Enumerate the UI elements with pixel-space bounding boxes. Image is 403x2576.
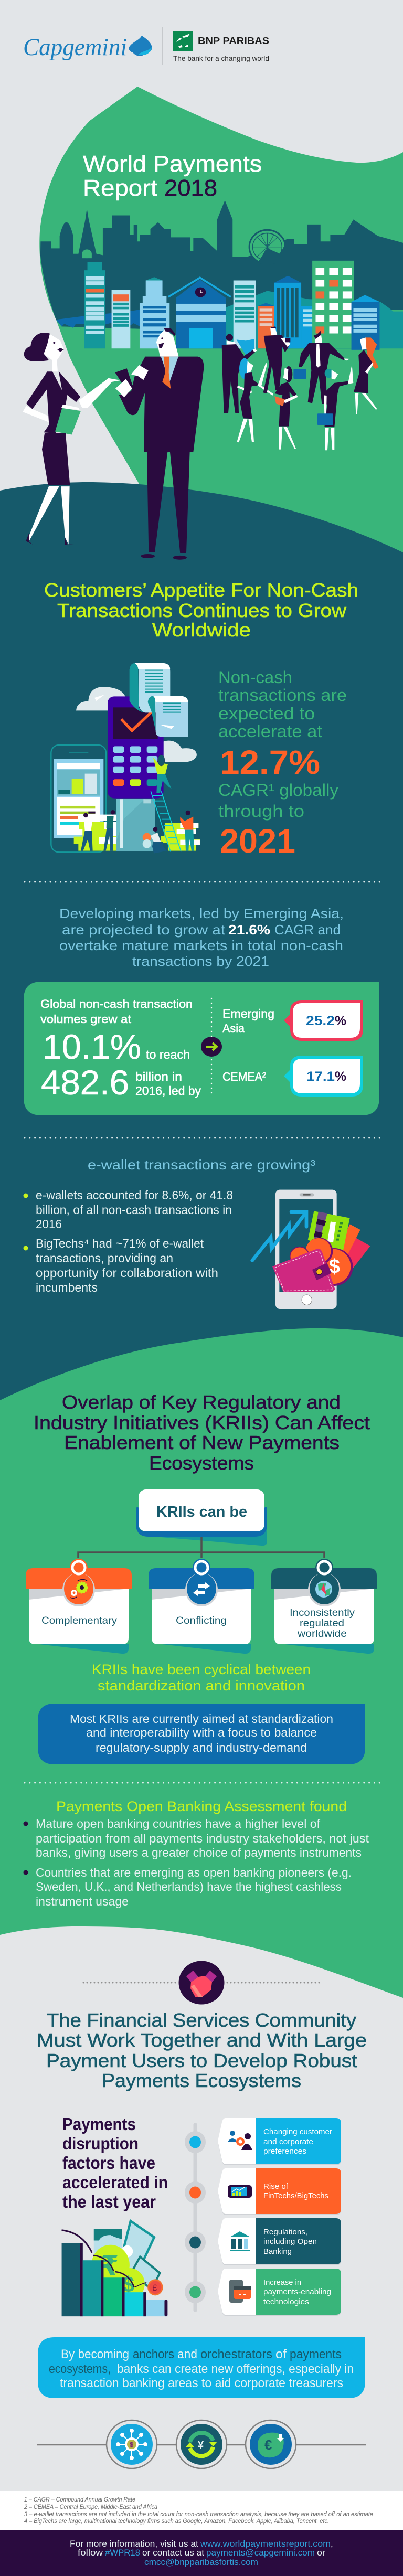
icon: phone and card bbox=[229, 2280, 251, 2303]
icon: exchange with yen bbox=[176, 2420, 227, 2468]
callout: 17.1%: % bbox=[335, 1069, 346, 1084]
panel: footer contact: www.worldpaymentsreport.com bbox=[200, 2539, 331, 2549]
building: orange block bbox=[258, 303, 274, 348]
icon: wallet bbox=[272, 1249, 335, 1292]
icon: cards bbox=[308, 1211, 370, 1268]
title: 2018 bbox=[164, 175, 217, 201]
text: global volumes: 10.1% bbox=[43, 1027, 141, 1066]
callout: 17.1%: 17.1 bbox=[306, 1069, 335, 1084]
building: blue tower bbox=[274, 276, 314, 348]
heading: financial services community: Payment Users to Develop Robust bbox=[46, 2050, 357, 2071]
text: payments disruption factors: the last year bbox=[62, 2192, 156, 2211]
text: non-cash growth callout: transactions are bbox=[218, 686, 347, 705]
person: large man with phone bbox=[115, 328, 204, 560]
text: region labels: Asia bbox=[222, 1021, 245, 1035]
callout: 25.2%: % bbox=[335, 1014, 346, 1028]
panel: complementary card: Complementary bbox=[41, 1615, 118, 1626]
text: KRIIs cyclical bbox=[92, 1662, 311, 1694]
text: payments disruption factors: Payments bbox=[62, 2114, 136, 2134]
text: e-wallet bullets: incumbents bbox=[36, 1281, 98, 1294]
panel: anchors and orchestrators callout: banks can create new offerings, especially in bbox=[117, 2362, 354, 2376]
text: non-cash growth callout: 12.7% bbox=[220, 743, 320, 781]
panel: conflicting card bbox=[149, 1559, 254, 1654]
icon: exchange with yen: ¥ bbox=[198, 2440, 204, 2451]
text: developing markets: Developing markets, led by Emerging Asia, bbox=[59, 906, 344, 921]
text: developing markets: CAGR and bbox=[274, 922, 341, 938]
icon: network with dollar: $ bbox=[130, 2441, 134, 2449]
panel: green KRII section background bbox=[0, 1328, 403, 2020]
panel: KRIIs standardization callout: and interoperability with a focus to balance bbox=[86, 1726, 317, 1739]
diagram: KRIIs can be box bbox=[136, 1489, 267, 1546]
text: global volumes: volumes grew at bbox=[40, 1013, 131, 1026]
text: payments disruption factors: accelerated in bbox=[62, 2173, 168, 2192]
panel: footer contact: For more information, visit us at bbox=[70, 2539, 198, 2549]
icon: payment terminal bbox=[108, 696, 164, 799]
heading: financial services community: Must Work Together and With Large bbox=[37, 2029, 367, 2051]
icon: ladder bbox=[151, 791, 181, 851]
person: man with binoculars bbox=[81, 812, 96, 851]
panel: conflicting card: Conflicting bbox=[176, 1615, 227, 1626]
panel: changing customer preferences bbox=[218, 2118, 341, 2165]
text: non-cash growth callout: through to bbox=[218, 802, 304, 821]
heading: customers' appetite: Worldwide bbox=[152, 619, 251, 641]
panel: anchors and orchestrators callout: By becoming bbox=[61, 2347, 129, 2361]
icon: globe bbox=[315, 1581, 332, 1598]
person: man with phone bbox=[263, 326, 290, 393]
building: stepped tower bbox=[140, 277, 169, 348]
building: dark blue block bbox=[352, 295, 379, 350]
text: region labels bbox=[222, 1007, 274, 1083]
heading: KRIIs overlap bbox=[34, 1391, 370, 1474]
icon: banknotes bbox=[94, 2221, 160, 2289]
heading: open banking assessment: Payments Open Banking Assessment found bbox=[56, 1798, 347, 1814]
text: global volumes: Global non-cash transaction bbox=[40, 997, 193, 1010]
panel: inconsistently regulated card: worldwide bbox=[297, 1628, 347, 1640]
logo: BNP Paribas: BNP PARIBAS bbox=[198, 36, 269, 46]
panel: changing customer preferences: Changing customer bbox=[263, 2127, 332, 2136]
person: woman with blue briefcase bbox=[317, 365, 353, 450]
panel: payments-enabling technologies: payments-enabling bbox=[263, 2287, 331, 2296]
chart: declining bars bbox=[62, 2243, 167, 2316]
panel: footer contact bbox=[0, 2530, 403, 2576]
text: global volumes: to reach bbox=[146, 1048, 190, 1061]
text: global volumes: 482.6 bbox=[41, 1063, 129, 1102]
heading: customers' appetite: Transactions Continues to Grow bbox=[57, 600, 347, 621]
icon: card bbox=[116, 799, 155, 851]
heading: customers' appetite: Customers’ Appetite For Non-Cash bbox=[44, 579, 358, 601]
text: developing markets: transactions by 2021 bbox=[132, 953, 269, 969]
icon: coins bbox=[91, 2245, 163, 2300]
icon: coins bbox=[290, 1238, 353, 1286]
panel: footnotes: 4 – BigTechs are large, multinational technology firms such as Google, Amazon, Facebook, Apple, Alibaba, Tencent, etc. bbox=[24, 2518, 329, 2525]
logo: Capgemini: Capgemini bbox=[23, 34, 127, 61]
panel: payments-enabling technologies: Increase in bbox=[263, 2278, 301, 2287]
panel: dark teal section background bbox=[0, 482, 403, 1417]
text: open banking bullets: instrument usage bbox=[36, 1894, 129, 1908]
panel: anchors and orchestrators callout: orchestrators bbox=[200, 2347, 272, 2361]
heading: KRIIs overlap: Ecosystems bbox=[149, 1452, 254, 1474]
title: World Payments bbox=[83, 151, 262, 177]
panel: footer contact: payments@capgemini.com bbox=[206, 2548, 315, 2558]
panel: footnotes bbox=[0, 2491, 403, 2530]
title bbox=[83, 151, 262, 201]
panel: rise of FinTechs: Rise of bbox=[263, 2182, 289, 2191]
text: non-cash growth callout bbox=[218, 668, 347, 860]
panel: grey ecosystem section background bbox=[0, 1926, 403, 2491]
panel: inconsistently regulated card bbox=[271, 1559, 377, 1654]
panel: KRIIs standardization callout: Most KRIIs are currently aimed at standardization bbox=[70, 1712, 333, 1726]
icon: arrow circle bbox=[201, 1037, 222, 1057]
building: bank with clock bbox=[168, 278, 231, 348]
panel: anchors and orchestrators callout: and bbox=[177, 2347, 197, 2361]
text: developing markets: overtake mature markets in total non-cash bbox=[59, 938, 343, 953]
heading: financial services community: Payments Ecosystems bbox=[102, 2070, 301, 2091]
text: developing markets: are projected to grow at bbox=[62, 922, 226, 938]
panel: payments-enabling technologies bbox=[218, 2269, 341, 2316]
text: global volumes: billion in bbox=[135, 1070, 182, 1083]
icon: coins: $ bbox=[123, 2273, 134, 2297]
text: KRIIs cyclical: standardization and innovation bbox=[98, 1678, 305, 1694]
illustration: city skyline and buildings bbox=[40, 200, 403, 350]
panel: rise of FinTechs bbox=[218, 2168, 341, 2215]
text: e-wallet bullets: BigTechs⁴ had ~71% of e-wallet bbox=[36, 1237, 204, 1250]
text: payments disruption factors: factors have bbox=[62, 2153, 155, 2173]
text: e-wallet bullets bbox=[23, 1188, 233, 1294]
logo: divider bbox=[162, 27, 163, 65]
panel: complementary card bbox=[26, 1559, 132, 1654]
icon: coins: $ bbox=[329, 1255, 340, 1278]
person: man with briefcase bbox=[293, 331, 350, 404]
icon: euro bubble: € bbox=[264, 2437, 272, 2453]
text: open banking bullets: Mature open banking countries have a higher level of bbox=[36, 1817, 321, 1830]
heading: KRIIs overlap: Enablement of New Payments bbox=[64, 1432, 340, 1453]
illustration: woman and man in foreground bbox=[23, 328, 204, 560]
callout: 25.2% bbox=[284, 1000, 363, 1041]
building: pale tower bbox=[112, 290, 130, 348]
illustration: declining bars with currency bbox=[62, 2221, 167, 2316]
icon: bank building bbox=[230, 2231, 250, 2251]
text: KRIIs cyclical: KRIIs have been cyclical between bbox=[92, 1662, 311, 1677]
logo: BNP Paribas: The bank for a changing world bbox=[173, 54, 269, 62]
text: global volumes: 2016, led by bbox=[135, 1084, 201, 1098]
text: open banking bullets: Sweden, U.K., and Netherlands) have the highest cashless bbox=[36, 1880, 342, 1893]
icon: network with dollar bbox=[107, 2420, 157, 2468]
text: open banking bullets: participation from all payments industry stakeholders, not just bbox=[36, 1832, 369, 1845]
text: non-cash growth callout: 2021 bbox=[220, 822, 295, 860]
panel: KRIIs standardization callout bbox=[38, 1704, 365, 1764]
text: e-wallet bullets: e-wallets accounted for 8.6%, or 41.8 bbox=[36, 1188, 233, 1202]
person: woman with orange book bbox=[274, 366, 298, 450]
person: kneeling woman with coins bbox=[143, 827, 167, 854]
icon: opposing arrows bbox=[193, 1582, 210, 1596]
panel: anchors and orchestrators callout: transaction banking areas to aid corporate treasurers bbox=[60, 2376, 343, 2390]
building: pale striped tower bbox=[234, 281, 256, 348]
person: woman with orange hair bbox=[354, 337, 379, 414]
heading: KRIIs overlap: Overlap of Key Regulatory and bbox=[62, 1391, 341, 1413]
heading: e-wallet: e-wallet transactions are growing³ bbox=[88, 1157, 315, 1173]
callout: 25.2%: 25.2 bbox=[306, 1014, 335, 1028]
heading: customers' appetite bbox=[44, 579, 358, 641]
person: man walking bbox=[103, 810, 115, 851]
panel: inconsistently regulated card: regulated bbox=[300, 1618, 344, 1629]
heading: financial services community: The Financial Services Community bbox=[47, 2009, 356, 2031]
panel: global volumes stat box bbox=[24, 982, 379, 1115]
panel: anchors and orchestrators callout: of bbox=[275, 2347, 287, 2361]
icon: stacks of money left bbox=[74, 815, 116, 851]
text: non-cash growth callout: expected to bbox=[218, 704, 315, 723]
title: Report bbox=[83, 175, 157, 201]
panel: footnotes: 3 – e-wallet transactions are not included in the total count for non-cash transaction analysis, because they are based off of an estimate bbox=[24, 2511, 373, 2518]
icon: phone with chart bbox=[228, 2185, 252, 2198]
icon: ferris wheel bbox=[249, 230, 288, 264]
text: region labels: Emerging bbox=[222, 1007, 274, 1020]
panel: rise of FinTechs: FinTechs/BigTechs bbox=[263, 2191, 328, 2200]
panel: footer contact: follow bbox=[78, 2548, 103, 2558]
text: region labels: CEMEA² bbox=[222, 1070, 266, 1083]
icon: people and gear bbox=[228, 2131, 252, 2150]
text: e-wallet bullets: transactions, providing an bbox=[36, 1251, 173, 1265]
text: e-wallet bullets: 2016 bbox=[36, 1217, 62, 1231]
panel: regulations bbox=[218, 2218, 341, 2265]
illustration: payment terminal with phone and people bbox=[51, 663, 200, 854]
panel: anchors and orchestrators callout bbox=[38, 2337, 365, 2398]
icon: euro bubble bbox=[246, 2420, 296, 2468]
panel: anchors and orchestrators callout: ecosystems, bbox=[49, 2362, 111, 2376]
panel: footnotes: 2 – CEMEA – Central Europe, Middle-East and Africa bbox=[24, 2504, 157, 2510]
person: woman with green folder bbox=[23, 333, 121, 545]
panel: footer contact: , bbox=[331, 2539, 333, 2549]
panel: anchors and orchestrators callout: payments bbox=[290, 2347, 342, 2361]
illustration: crowd of business people bbox=[222, 326, 379, 450]
icon: stacks of money right bbox=[161, 823, 200, 851]
panel: inconsistently regulated card: Inconsistently bbox=[290, 1608, 355, 1619]
building: tall teal tower bbox=[84, 262, 105, 348]
text: payments disruption factors bbox=[62, 2114, 168, 2211]
text: non-cash growth callout: CAGR¹ globally bbox=[218, 781, 338, 800]
panel: footer contact: or bbox=[317, 2548, 325, 2558]
logo: BNP Paribas bbox=[173, 31, 269, 62]
text: global volumes bbox=[40, 997, 201, 1102]
panel: footnotes: 1 – CAGR – Compound Annual Growth Rate bbox=[24, 2497, 135, 2503]
text: e-wallet bullets: opportunity for collaboration with bbox=[36, 1266, 218, 1280]
heading: financial services community bbox=[37, 2009, 367, 2091]
panel: anchors and orchestrators callout: anchors bbox=[133, 2347, 174, 2361]
panel: changing customer preferences: and corporate bbox=[263, 2137, 313, 2146]
person: man from behind bbox=[222, 334, 257, 413]
heading: KRIIs overlap: Industry Initiatives (KRIIs) Can Affect bbox=[34, 1412, 370, 1433]
icon: handshake bbox=[178, 1961, 225, 2004]
illustration: phone with wallet, cards and coins bbox=[252, 1190, 370, 1309]
callout: 17.1% bbox=[284, 1056, 363, 1097]
text: non-cash growth callout: accelerate at bbox=[218, 722, 322, 741]
icon: phone bbox=[275, 1190, 337, 1309]
text: open banking bullets: banks, giving users a greater choice of payments instruments bbox=[36, 1846, 362, 1859]
icon: rising arrow bbox=[252, 1212, 306, 1261]
panel: footer contact: #WPR18 bbox=[105, 2548, 140, 2558]
person: woman with blue hair bbox=[237, 358, 273, 442]
person: man with orange top bbox=[180, 811, 194, 851]
panel: footer contact: cmcc@bnpparibasfortis.com bbox=[144, 2557, 258, 2567]
text: developing markets bbox=[59, 906, 344, 969]
diagram: timeline stem with knobs bbox=[185, 2123, 206, 2312]
panel: footer contact: or contact us at bbox=[142, 2548, 204, 2558]
panel: payments-enabling technologies: technologies bbox=[263, 2297, 309, 2306]
arrows: step arrows bbox=[62, 2230, 146, 2287]
panel: hero green background bbox=[39, 87, 403, 556]
panel: KRIIs standardization callout: regulatory-supply and industry-demand bbox=[96, 1741, 307, 1754]
text: payments disruption factors: disruption bbox=[62, 2134, 139, 2153]
icon: coins: £ bbox=[152, 2283, 157, 2293]
text: open banking bullets bbox=[23, 1817, 369, 1908]
icon: coins: ₹ bbox=[101, 2250, 119, 2282]
text: e-wallet bullets: billion, of all non-cash transactions in bbox=[36, 1203, 232, 1217]
panel: regulations: including Open bbox=[263, 2237, 317, 2246]
text: open banking bullets: Countries that are emerging as open banking pioneers (e.g. bbox=[36, 1866, 352, 1879]
panel: changing customer preferences: preferences bbox=[263, 2147, 306, 2156]
person: woman on terminal bbox=[153, 755, 172, 793]
icon: phone with charts bbox=[51, 745, 106, 852]
building: green windowed block bbox=[312, 261, 354, 348]
icon: clouds bbox=[76, 687, 197, 762]
icon: receipts bbox=[130, 663, 188, 737]
text: developing markets: 21.6% bbox=[228, 922, 270, 938]
panel: regulations: Regulations, bbox=[263, 2228, 307, 2237]
diagram: KRIIs can be box: KRIIs can be bbox=[156, 1504, 247, 1520]
panel: regulations: Banking bbox=[263, 2247, 292, 2256]
text: non-cash growth callout: Non-cash bbox=[218, 668, 292, 687]
icon: gears bbox=[70, 1579, 87, 1598]
